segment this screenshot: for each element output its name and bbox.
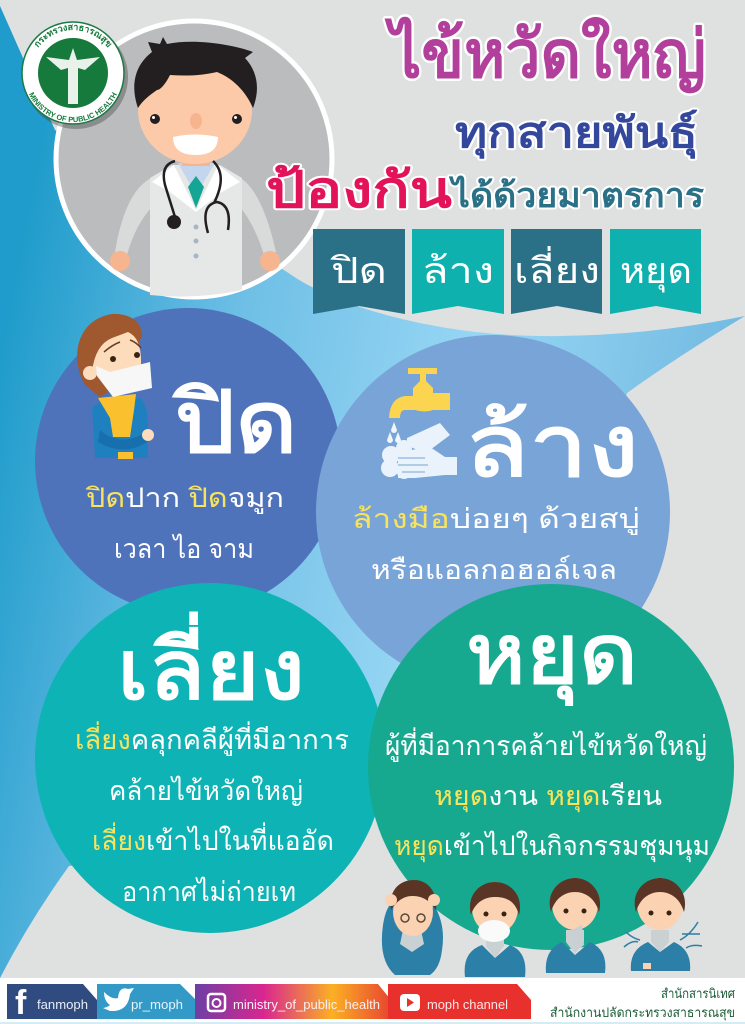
icon: shivering person xyxy=(624,878,702,971)
panel text: หยุด: ผู้ที่มีอาการคล้ายไข้หวัดใหญ่ xyxy=(385,727,707,762)
youtube tag xyxy=(388,984,531,1019)
icon: headache person xyxy=(382,880,443,975)
panel text: เลี่ยง xyxy=(75,721,349,907)
panel text: ปิด: เวลา ไอ จาม xyxy=(114,534,254,564)
panel text: ล้าง: หรือแอลกอฮอล์เจล xyxy=(371,554,617,585)
instagram tag xyxy=(195,984,391,1019)
panel heading: เลี่ยง: เลี่ยง xyxy=(117,612,305,717)
icon: person with mask xyxy=(465,882,525,977)
panel text: หยุด: หยุดงาน หยุดเรียน xyxy=(434,781,662,813)
panel text: ล้าง: ล้างมือ บ่อยๆ ด้วยสบู่ xyxy=(352,504,640,535)
icon: person with mask xyxy=(77,314,154,459)
youtube tag: moph channel xyxy=(427,997,508,1012)
doctor portrait xyxy=(56,21,332,297)
panel text: เลี่ยง: อากาศไม่ถ่ายเท xyxy=(122,877,296,907)
ribbon: เลี่ยง: เลี่ยง xyxy=(514,246,600,291)
facebook tag: f xyxy=(15,984,27,1022)
subtitle: ทุกสายพันธุ์ xyxy=(455,109,698,159)
ministry logo xyxy=(21,21,128,129)
prevention heading: ป้องกัน xyxy=(266,162,452,218)
icon: coughing person xyxy=(546,878,605,973)
panel text: ปิด: ปิดปาก ปิดจมูก xyxy=(85,483,284,514)
ribbon: ล้าง xyxy=(412,229,504,314)
ministry logo: MINISTRY OF PUBLIC HEALTH xyxy=(29,92,117,122)
panel text: หยุด: หยุดเข้าไปในกิจกรรมชุมนุม xyxy=(394,830,710,863)
panel heading: ปิด: ปิด xyxy=(172,375,298,471)
panel: หยุด xyxy=(368,584,734,950)
panel heading: ล้าง: ล้าง xyxy=(465,399,639,495)
panel text: ปิด xyxy=(85,483,284,564)
icon: tap and washing hands xyxy=(381,368,457,479)
facebook tag: fanmoph xyxy=(37,997,88,1012)
ribbon: ล้าง: ล้าง xyxy=(422,250,494,291)
panel text: ล้าง xyxy=(352,504,640,585)
panel text: หยุด xyxy=(385,727,710,863)
publisher credit xyxy=(550,986,736,1021)
facebook tag xyxy=(7,984,97,1022)
footer xyxy=(0,978,745,1024)
instagram tag: ministry_of_public_health xyxy=(233,997,380,1012)
title: ได้ด้วยมาตรการ xyxy=(449,175,705,215)
twitter tag xyxy=(97,984,196,1019)
panel: เลี่ยง xyxy=(35,583,385,933)
ribbon: ปิด: ปิด xyxy=(330,250,387,291)
ministry logo: กระทรวงสาธารณสุข xyxy=(35,24,112,48)
panel text: เลี่ยง: คล้ายไข้หวัดใหญ่ xyxy=(109,775,303,806)
panel: ล้าง xyxy=(316,335,670,689)
publisher credit: สำนักงานปลัดกระทรวงสาธารณสุข xyxy=(550,1005,735,1021)
ribbon: เลี่ยง xyxy=(511,229,602,314)
title: ไข้หวัดใหญ่ xyxy=(384,15,706,93)
ribbon: หยุด xyxy=(610,229,701,314)
title xyxy=(266,15,706,218)
ribbon: ปิด xyxy=(313,229,405,314)
panel: ปิด xyxy=(35,308,341,614)
panel text: เลี่ยง: เลี่ยงเข้าไปในที่แออัด xyxy=(92,822,334,856)
panel text: เลี่ยง: เลี่ยงคลุกคลีผู้ที่มีอาการ xyxy=(75,721,349,757)
twitter tag: pr_moph xyxy=(131,997,183,1012)
publisher credit: สำนักสารนิเทศ xyxy=(661,986,736,1001)
ribbon: หยุด: หยุด xyxy=(620,250,692,293)
panel heading: หยุด: หยุด xyxy=(466,607,638,706)
